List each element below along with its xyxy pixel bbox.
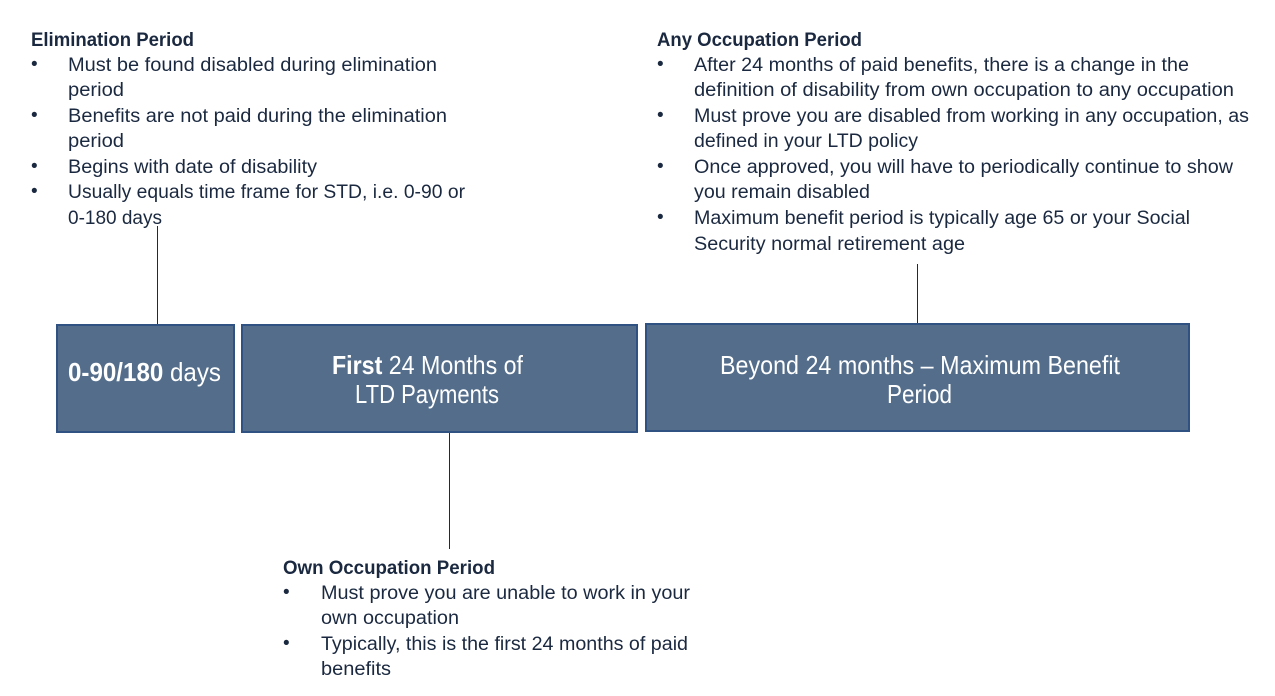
bullet list: Own Occupation Period: •	[283, 633, 290, 654]
bullet list: Any Occupation Period: defined in your LTD policy	[694, 131, 919, 152]
bullet list: Own Occupation Period: own occupation	[321, 608, 459, 629]
bullet list: Elimination Period: period	[68, 131, 124, 152]
bullet list: Any Occupation Period: you remain disabled	[694, 182, 870, 203]
bullet list: Elimination Period	[31, 54, 466, 229]
bullet list: Any Occupation Period: •	[657, 105, 664, 126]
bullet list: Any Occupation Period: Must prove you are disabled from working in any occupation, as	[694, 106, 1249, 127]
bullet list: Any Occupation Period: definition of disability from own occupation to any occupation	[694, 80, 1234, 101]
bullet list: Own Occupation Period: Must prove you are unable to work in your	[321, 583, 691, 604]
bullet list: Own Occupation Period: •	[283, 582, 290, 603]
connector: elimination text to first box	[156, 226, 158, 324]
bullet list: Elimination Period: Benefits are not paid during the elimination	[68, 106, 447, 127]
bullet list: Any Occupation Period: •	[657, 156, 664, 177]
bullet list: Elimination Period: Begins with date of disability	[68, 157, 318, 178]
text block: Any Occupation Period	[657, 29, 1249, 255]
bullet list: Own Occupation Period: benefits	[321, 659, 391, 680]
bullet list: Any Occupation Period	[657, 54, 1249, 255]
bullet list: Any Occupation Period: •	[657, 54, 664, 75]
bullet list: Elimination Period: Must be found disabled during elimination	[68, 55, 437, 76]
bullet list: Any Occupation Period: After 24 months of paid benefits, there is a change in the	[694, 55, 1189, 76]
text block: Own Occupation Period	[283, 557, 691, 680]
bullet list: Own Occupation Period	[283, 582, 691, 680]
timeline box: Beyond 24 months - Maximum Benefit Period: Beyond 24 months – Maximum Benefit	[720, 350, 1121, 380]
bullet list: Any Occupation Period: Once approved, you will have to periodically continue to show	[694, 157, 1233, 178]
heading: Any Occupation Period: Any Occupation Period	[657, 29, 862, 51]
timeline box: Beyond 24 months - Maximum Benefit Period	[646, 324, 1189, 431]
bullet list: Elimination Period: period	[68, 80, 124, 101]
timeline box: First 24 Months of LTD Payments	[242, 325, 637, 432]
bullet list: Any Occupation Period: Security normal retirement age	[694, 234, 965, 255]
timeline box: 0-90/180 days: 0-90/180 days	[68, 357, 221, 387]
text block: Elimination Period	[31, 29, 466, 229]
connector: second box to own occupation text	[448, 433, 450, 549]
bullet list: Elimination Period: Usually equals time frame for STD, i.e. 0-90 or	[68, 182, 466, 203]
heading: Elimination Period: Elimination Period	[31, 29, 194, 51]
connector: any occupation text to third box	[916, 264, 918, 323]
timeline box: Beyond 24 months - Maximum Benefit Period: Period	[887, 379, 952, 409]
bullet list: Elimination Period: •	[31, 105, 38, 126]
bullet list: Elimination Period: •	[31, 181, 38, 202]
heading: Own Occupation Period: Own Occupation Period	[283, 557, 495, 579]
timeline box: First 24 Months of LTD Payments: First 24 Months of	[332, 350, 524, 380]
bullet list: Elimination Period: •	[31, 156, 38, 177]
bullet list: Any Occupation Period: •	[657, 207, 664, 228]
timeline box: 0-90/180 days	[57, 325, 234, 432]
bullet list: Elimination Period: •	[31, 54, 38, 75]
bullet list: Elimination Period: 0-180 days	[68, 208, 162, 229]
timeline box: First 24 Months of LTD Payments: LTD Payments	[355, 379, 499, 409]
bullet list: Own Occupation Period: Typically, this is the first 24 months of paid	[321, 634, 688, 655]
bullet list: Any Occupation Period: Maximum benefit period is typically age 65 or your Social	[694, 208, 1190, 229]
